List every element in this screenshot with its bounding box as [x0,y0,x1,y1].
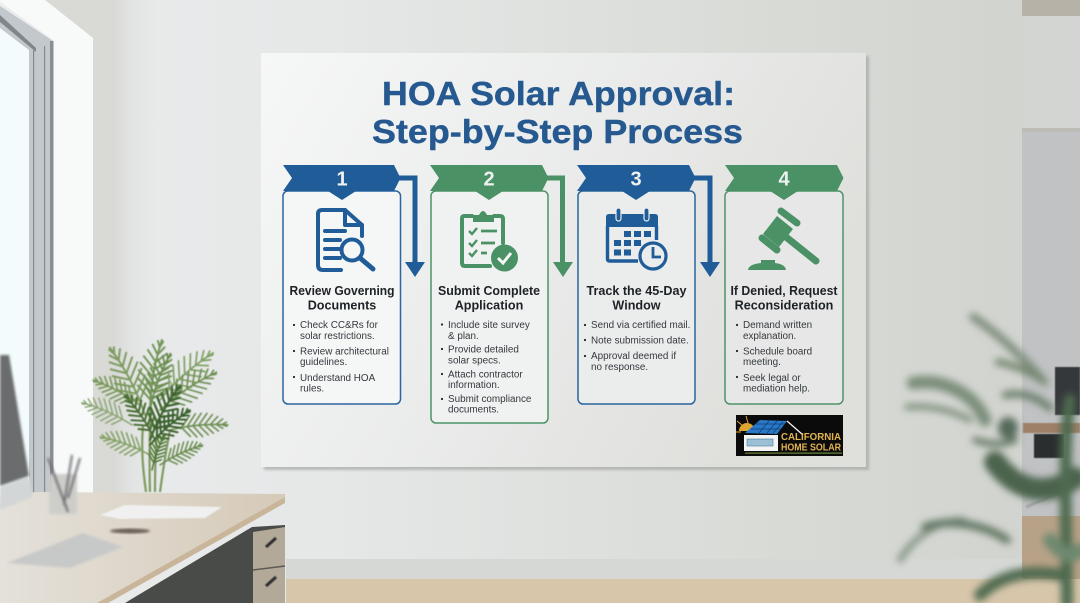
bullet list 2: information. [448,380,500,391]
step 2 panel [430,165,573,423]
bullet list 4: mediation help. [743,384,810,394]
card 2 [431,191,548,423]
heading 2: Submit Complete [438,284,540,298]
step 1 panel [283,165,425,404]
icon: gavel [748,211,816,270]
heading 4: If Denied, Request [730,284,838,298]
heading 3: Window [612,298,661,312]
blurred foreground plant [900,317,1080,603]
title: HOA Solar Approval: [382,76,735,113]
bullet list 1: rules. [300,384,324,394]
heading 1 [290,284,394,312]
bullet list 3: Approval deemed if [591,351,676,362]
card 1 [283,191,400,404]
bullet list 4: Demand written [743,320,812,331]
title: Step-by-Step Process [372,114,743,151]
bullet list 3: Note submission date. [591,336,689,346]
number 4: 4 [778,168,790,190]
bullet list 2: Submit compliance [448,394,532,405]
bullet list 2: documents. [448,404,499,416]
card 4 [725,191,843,404]
bullet list 3: no response. [591,362,648,373]
heading 4 [730,284,838,312]
arrow 2 [544,178,573,277]
icon: clipboard with check [462,211,518,272]
monitor on desk [0,355,33,510]
logo: California Home Solar: HOME SOLAR [781,442,841,454]
potted palm plant [78,337,229,492]
bullet list 1: guidelines. [300,357,347,368]
bullet list 2: Attach contractor [448,370,523,380]
heading 1: Documents [308,298,376,312]
bullet list 1: Check CC&Rs for [300,320,379,331]
bullet list 3 [584,320,690,373]
card 3 [578,191,695,404]
desk items [7,455,222,568]
icon: calendar with clock [606,208,666,269]
heading 4: Reconsideration [735,298,833,312]
bullet list 4 [736,320,812,394]
title [372,76,743,151]
number 3: 3 [630,168,642,190]
number 2: 2 [483,168,495,190]
heading 3 [586,284,686,312]
bullet list 1: solar restrictions. [300,331,375,342]
heading 1: Review Governing [290,284,394,298]
bullet list 4: meeting. [743,357,781,368]
bullet list 2: Include site survey [448,320,530,331]
bullet list 3: Send via certified mail. [591,320,690,331]
right side room and floor [286,0,1080,603]
heading 2 [438,284,540,312]
logo: California Home Solar [736,415,843,456]
ribbon 1 [283,165,400,200]
bullet list 1 [293,320,389,394]
bullet list 2: Provide detailed [448,344,519,356]
arrow 1 [396,178,425,277]
bullet list 1: Understand HOA [300,373,376,384]
heading 2: Application [455,298,523,312]
window on left [0,0,93,495]
ribbon 2 [430,165,548,200]
bullet list 4: Seek legal or [743,373,801,384]
bullet list 2: solar specs. [448,356,501,366]
icon: document with magnifier [318,210,373,270]
bullet list 1: Review architectural [300,346,389,358]
step 4 panel [725,165,844,404]
ribbon 4 [725,165,844,200]
arrow 3 [691,178,720,277]
bullet list 4: explanation. [743,331,796,342]
bullet list 2: & plan. [448,331,479,342]
step 3 panel [577,165,720,404]
logo: California Home Solar: CALIFORNIA [781,432,841,443]
bullet list 2 [441,320,532,416]
infographic board [261,53,866,467]
number 1: 1 [336,168,348,190]
heading 3: Track the 45-Day [586,284,686,298]
ribbon 3 [577,165,696,200]
bullet list 4: Schedule board [743,346,812,358]
desk [0,492,285,603]
board shadow [264,56,869,470]
